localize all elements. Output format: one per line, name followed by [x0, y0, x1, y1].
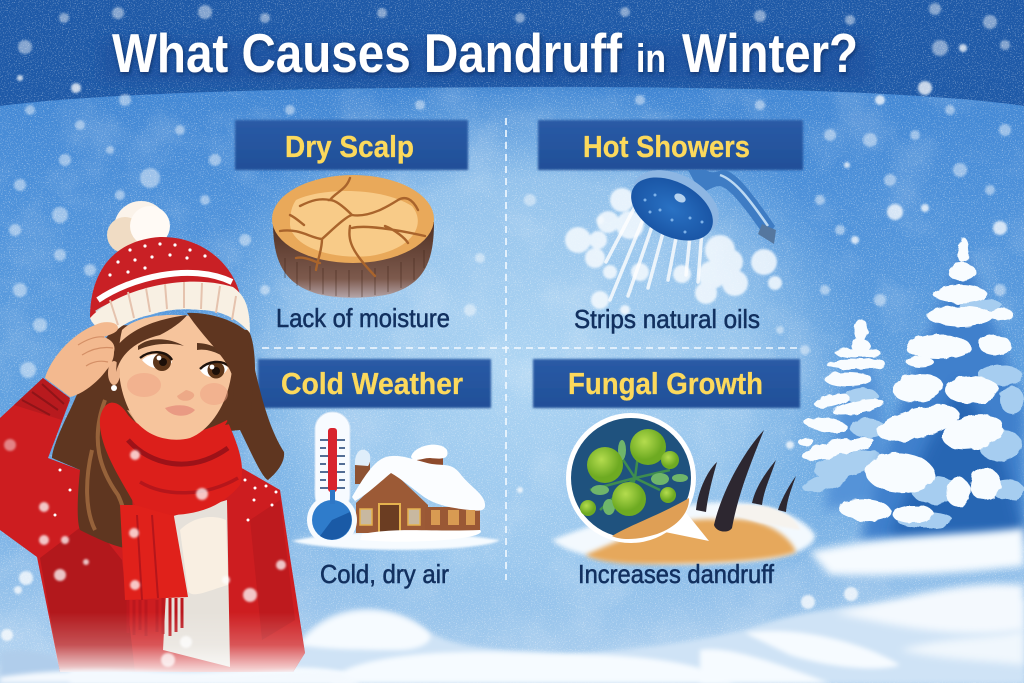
face [108, 315, 232, 440]
heading: hot showers [538, 120, 803, 170]
panel: dry scalp [235, 120, 468, 333]
caption: strips natural oils: Strips natural oils [574, 304, 760, 334]
caption: increases dandruff: Increases dandruff [578, 559, 775, 589]
icon: cracked scalp [272, 175, 434, 298]
lower sweater fade [47, 612, 305, 672]
scarf [100, 403, 242, 636]
hat [90, 201, 250, 333]
icon: shower head [565, 157, 782, 315]
hair shafts [696, 430, 796, 532]
shirt [163, 500, 230, 667]
panel: cold weather [258, 359, 500, 589]
icon: fungi on scalp [552, 413, 815, 564]
neck [127, 410, 185, 445]
title: Winter? [682, 22, 858, 84]
heading: fungal growth [533, 359, 800, 408]
big tree [838, 237, 1024, 540]
hair back [52, 325, 284, 549]
caption: cold, dry air: Cold, dry air [320, 559, 449, 589]
title banner [100, 22, 870, 84]
caption: lack of moisture: Lack of moisture [276, 303, 450, 333]
hair strands [87, 400, 135, 546]
ground snow [0, 528, 1024, 683]
hand [45, 322, 118, 397]
heading: cold weather [258, 359, 491, 408]
foreground snow [0, 670, 360, 683]
heading: dry scalp [235, 120, 468, 170]
small tree [798, 319, 895, 510]
heading: fungal growth: Fungal Growth [568, 366, 763, 401]
heading: dry scalp: Dry Scalp [285, 129, 414, 164]
sweater [0, 378, 305, 672]
girl character [0, 201, 305, 672]
heading: cold weather: Cold Weather [281, 366, 463, 401]
divider lines [262, 118, 800, 580]
icon: thermometer [307, 412, 357, 545]
panel: hot showers [538, 120, 803, 334]
heading: hot showers: Hot Showers [583, 129, 750, 164]
panel: fungal growth [533, 359, 815, 589]
title: in [636, 37, 666, 81]
hair front [116, 313, 252, 425]
trees [798, 237, 1024, 540]
icon: snow-covered house [292, 445, 500, 550]
title: What Causes Dandruff [112, 22, 623, 84]
